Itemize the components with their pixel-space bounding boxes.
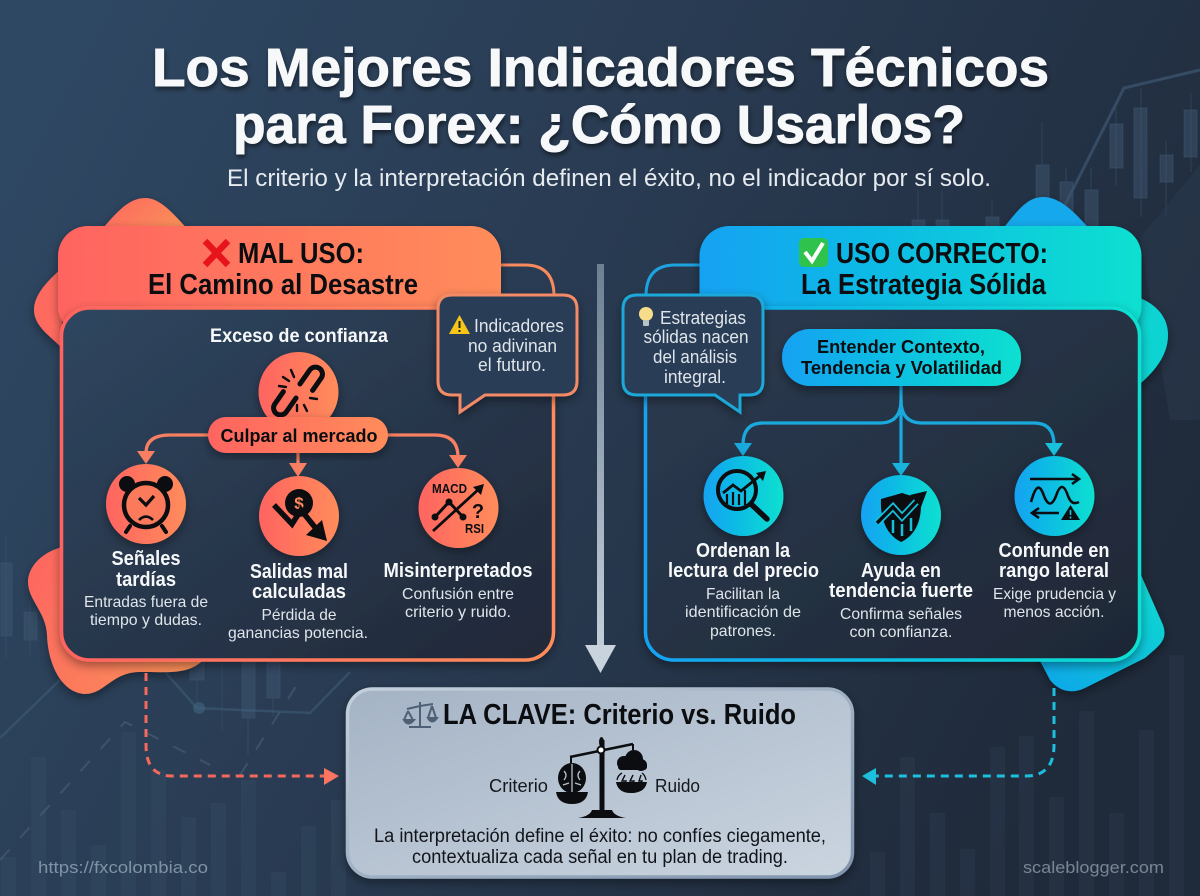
- icon: broken chain: [258, 352, 338, 432]
- callout text: Estrategias: [660, 308, 746, 328]
- icon: light bulb: [639, 307, 653, 326]
- icon: balance with brain and cloud: [556, 737, 647, 818]
- item: confunde en rango lateral: Confunde en: [998, 540, 1110, 562]
- heading: uso correcto: La Estrategia Sólida: [801, 269, 1047, 301]
- title: para Forex: ¿Cómo Usarlos?: [233, 95, 965, 155]
- pill: culpar al mercado: Culpar al mercado: [220, 425, 378, 446]
- icon: falling money: $: [294, 494, 304, 513]
- heading: uso correcto: USO CORRECTO:: [836, 238, 1048, 270]
- item: ordenan la lectura: lectura del precio: [668, 560, 819, 582]
- pill: entender contexto: Entender Contexto,: [817, 336, 985, 357]
- icon: sad alarm clock: [106, 464, 186, 544]
- icon: warning: [449, 315, 470, 334]
- heading: el camino al desastre: El Camino al Desastre: [148, 269, 418, 301]
- footer: source right: scaleblogger.com: [1023, 858, 1164, 877]
- icon: shield with rising chart: [861, 475, 941, 555]
- arrow: uso correcto to la clave: [862, 688, 1054, 785]
- item: confunde en rango lateral: rango lateral: [999, 560, 1109, 582]
- item: ayuda en tendencia: tendencia fuerte: [829, 580, 973, 602]
- item: ayuda en tendencia: con confianza.: [850, 624, 952, 641]
- item: ordenan la lectura: [668, 456, 819, 640]
- item: ordenan la lectura: Ordenan la: [696, 540, 791, 562]
- connector to callout: [646, 265, 705, 296]
- decorative cyan blobs: [1000, 197, 1168, 691]
- item: señales tardías: Entradas fuera de: [84, 594, 208, 611]
- arrows from culpar al mercado: [137, 435, 467, 477]
- arrows from entender contexto: [734, 386, 1063, 476]
- label: ruido: Ruido: [655, 776, 700, 796]
- panel body: mal uso: [62, 308, 554, 660]
- icon: range waves with warning: [1014, 456, 1094, 536]
- item: señales tardías: tardías: [116, 569, 176, 591]
- pill: culpar al mercado: [208, 417, 388, 453]
- pill: entender contexto: Tendencia y Volatilidad: [801, 357, 1002, 378]
- item: misinterpretados: Misinterpretados: [384, 560, 532, 582]
- central divider arrow: [585, 264, 616, 673]
- item: ordenan la lectura: patrones.: [710, 623, 776, 640]
- item: salidas mal calculadas: calculadas: [252, 581, 346, 603]
- item: confunde en rango lateral: [993, 456, 1116, 621]
- item: ordenan la lectura: Facilitan la: [706, 586, 780, 603]
- item: ayuda en tendencia: [829, 475, 973, 641]
- brain: [558, 763, 586, 793]
- icon: small grey scales: [404, 702, 437, 727]
- panel header: uso correcto: [700, 226, 1142, 336]
- item: ayuda en tendencia: Ayuda en: [861, 560, 941, 582]
- item: salidas mal calculadas: [228, 476, 368, 642]
- item: misinterpretados: Confusión entre: [402, 586, 514, 603]
- item: señales tardías: [84, 464, 208, 629]
- callout: estrategias sólidas: [623, 295, 763, 412]
- callout text: el futuro.: [478, 355, 546, 375]
- callout: indicadores: [438, 295, 577, 412]
- icon: chart magnifier: [704, 456, 784, 536]
- icon: falling money: [259, 476, 339, 556]
- item: misinterpretados: criterio y ruido.: [405, 604, 511, 621]
- item: confunde en rango lateral: menos acción.: [1004, 604, 1104, 621]
- heading: uso correcto: [799, 238, 1048, 301]
- item: confunde en rango lateral: Exige prudencia y: [993, 586, 1116, 603]
- heading: mal uso: MAL USO:: [238, 238, 364, 270]
- icon: macd rsi confusion: MACD: [432, 481, 467, 496]
- item: ayuda en tendencia: Confirma señales: [840, 606, 962, 623]
- panel: uso correcto: [646, 197, 1168, 691]
- decorative orange blobs: [28, 198, 205, 694]
- callout text: Indicadores: [474, 316, 564, 336]
- storm cloud: [617, 750, 647, 771]
- item: salidas mal calculadas: ganancias potencia.: [228, 625, 368, 642]
- title: [152, 38, 1049, 155]
- title: Los Mejores Indicadores Técnicos: [152, 38, 1049, 98]
- subtitle: El criterio y la interpretación definen el éxito, no el indicador por sí solo.: [227, 165, 991, 192]
- callout text: sólidas nacen: [644, 327, 748, 347]
- icon: macd rsi confusion: [418, 468, 498, 548]
- item: salidas mal calculadas: Pérdida de: [262, 607, 337, 624]
- panel body: uso correcto: [646, 308, 1140, 660]
- callout text: [644, 308, 748, 387]
- callout text: integral.: [664, 367, 726, 387]
- callout text: no adivinan: [468, 336, 557, 356]
- item: ordenan la lectura: identificación de: [685, 604, 801, 621]
- footer: source left: https://fxcolombia.co: [38, 858, 208, 877]
- connector to callout: [495, 265, 554, 296]
- icon: macd rsi confusion: RSI: [465, 521, 484, 536]
- heading: la clave: LA CLAVE: Criterio vs. Ruido: [443, 699, 796, 731]
- key message: [374, 826, 826, 868]
- callout text: del análisis: [653, 347, 737, 367]
- item: salidas mal calculadas: Salidas mal: [250, 561, 348, 583]
- panel: la clave: [348, 689, 852, 877]
- panel header: mal uso: [58, 226, 501, 336]
- icon: red cross: [205, 241, 228, 265]
- heading: exceso de confianza: Exceso de confianza: [210, 326, 388, 347]
- item: señales tardías: tiempo y dudas.: [90, 612, 202, 629]
- key message: La interpretación define el éxito: no confíes ciegamente,: [374, 826, 826, 847]
- pill: entender contexto: [782, 329, 1021, 386]
- label: criterio: Criterio: [489, 776, 548, 796]
- item: misinterpretados: [384, 468, 532, 621]
- callout text: [468, 316, 564, 375]
- panel: mal uso: [28, 198, 554, 694]
- icon: macd rsi confusion: ?: [472, 501, 484, 523]
- item: señales tardías: Señales: [112, 548, 180, 570]
- key message: contextualiza cada señal en tu plan de trading.: [412, 847, 788, 868]
- arrow: mal uso to la clave: [146, 673, 339, 785]
- icon: green check: [799, 238, 828, 267]
